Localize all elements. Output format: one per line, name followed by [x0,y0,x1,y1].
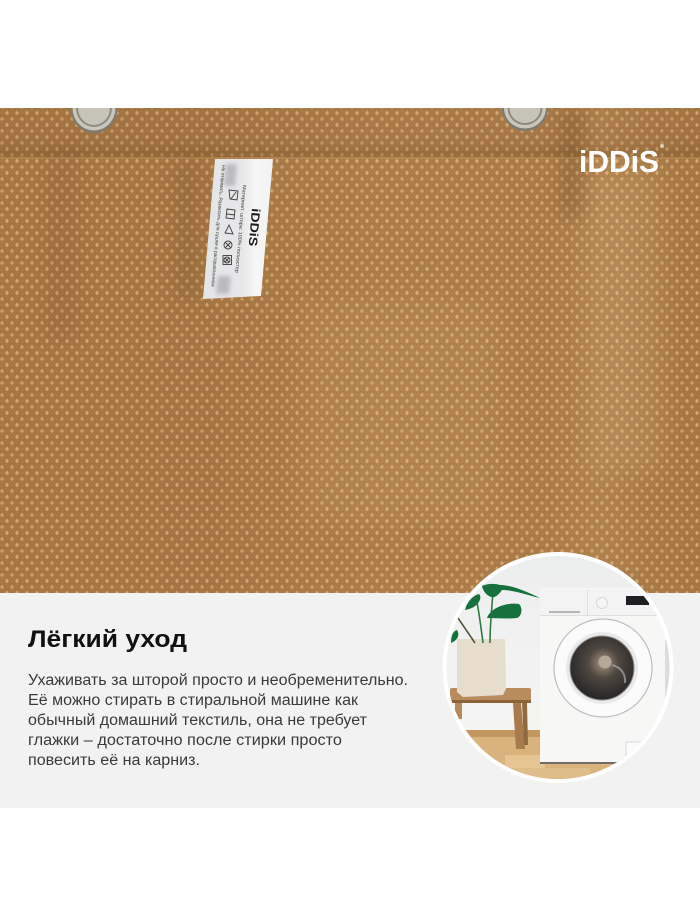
text block: description: Ухаживать за шторой просто и необременительно. [28,672,408,689]
icon: right curtain grommet [502,108,548,131]
photo: wooden floor [466,730,646,779]
logo: iddis brand mark: iDDiS [579,145,659,179]
label: brand name: iDDiS [246,208,263,247]
label: blurred stripes [216,164,237,294]
text block: description: Её можно стирать в стиральной машине как [28,692,358,709]
photo: wall strip right of machine [665,640,670,698]
panel: curtain fabric photo [0,83,700,593]
label: care symbols [223,190,238,264]
photo: wooden stool [450,688,531,749]
icon: left curtain grommet [70,108,118,133]
photo: wall [446,556,666,730]
label: instructions text: Не отжимать. Развесить для сушки в расправленном [209,165,226,287]
text block: description: глажки – достаточно после стирки просто [28,732,342,749]
text block: description: повесить её на карниз. [28,752,200,769]
logo: registered mark [660,144,664,148]
heading: Лёгкий уход [28,626,187,653]
photo: washing machine [540,588,665,764]
text block: description: обычный домашний текстиль, она не требует [28,712,367,729]
panel: light-grey text band [0,593,700,808]
photo: plant [451,584,540,643]
label: material text: Материал: штора: 100% полиэстер [233,185,247,273]
photo: canvas bag [457,639,506,697]
care label sewn on the curtain [203,159,273,299]
circular photo: washing machine in a room [440,550,680,787]
text block: description [28,672,408,769]
